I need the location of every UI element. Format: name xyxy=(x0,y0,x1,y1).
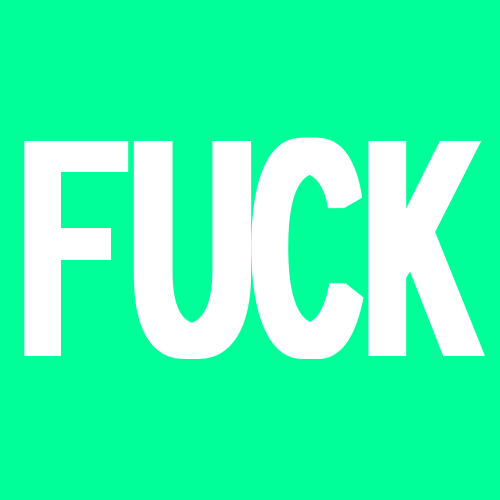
letter C: C xyxy=(245,75,352,425)
letter F middle bar xyxy=(61,228,111,260)
letter F: F xyxy=(12,75,123,425)
letter F counter xyxy=(61,172,131,358)
letter K: K xyxy=(358,75,471,425)
letter U: U xyxy=(124,75,248,425)
